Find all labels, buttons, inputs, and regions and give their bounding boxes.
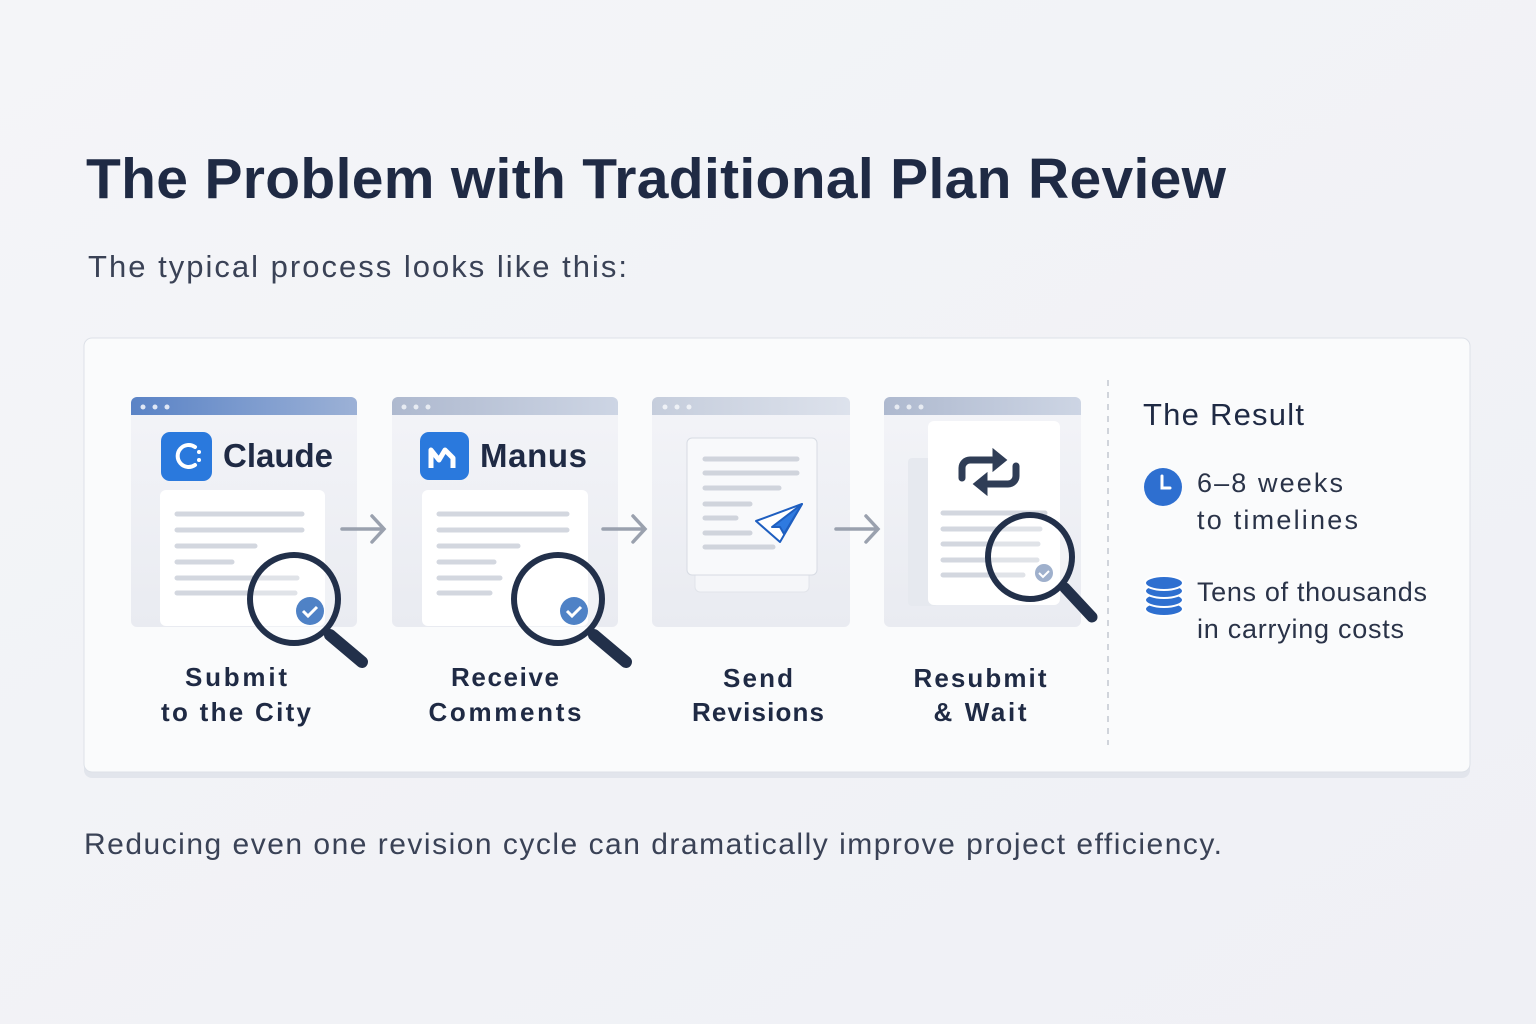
result block: in carrying costs xyxy=(1197,614,1404,644)
step 3: send xyxy=(652,397,850,727)
step 3: send: Send xyxy=(723,663,793,693)
arrow xyxy=(603,516,645,542)
label: Submit xyxy=(185,662,287,692)
title: The Problem with Traditional Plan Review xyxy=(86,147,1227,211)
result block xyxy=(1143,397,1427,644)
icon: magnifier xyxy=(250,555,362,662)
arrow xyxy=(836,516,878,542)
step 2: comments: Receive xyxy=(451,662,559,692)
step 2: comments: Comments xyxy=(428,697,582,727)
step 2: comments: Manus xyxy=(480,437,587,474)
result block: to timelines xyxy=(1197,505,1358,535)
result block: The Result xyxy=(1143,397,1304,432)
icon: manus logo xyxy=(420,432,469,480)
step 4: resubmit: & Wait xyxy=(934,697,1027,727)
icon: paper plane xyxy=(756,504,802,542)
icon: magnifier xyxy=(988,515,1092,617)
step 1: submit: to the City xyxy=(161,697,312,727)
arrow xyxy=(342,516,384,542)
subtitle: The typical process looks like this: xyxy=(88,249,627,284)
step 1: submit xyxy=(131,397,362,727)
result block: Tens of thousands xyxy=(1197,577,1427,607)
icon: magnifier xyxy=(514,555,626,662)
icon: coins xyxy=(1145,576,1183,616)
step 2: comments xyxy=(392,397,626,727)
step 4: resubmit: Resubmit xyxy=(914,663,1047,693)
step 4: resubmit xyxy=(884,397,1092,727)
icon: repeat xyxy=(962,451,1016,493)
step 3: send: Revisions xyxy=(692,697,824,727)
icon: clock xyxy=(1144,468,1182,506)
panel: process xyxy=(84,338,1470,778)
step 1: submit: Claude xyxy=(223,437,333,474)
footer text: Reducing even one revision cycle can dramatically improve project efficiency. xyxy=(84,828,1222,861)
icon: claude logo xyxy=(161,432,212,481)
result block: 6–8 weeks xyxy=(1197,468,1343,498)
